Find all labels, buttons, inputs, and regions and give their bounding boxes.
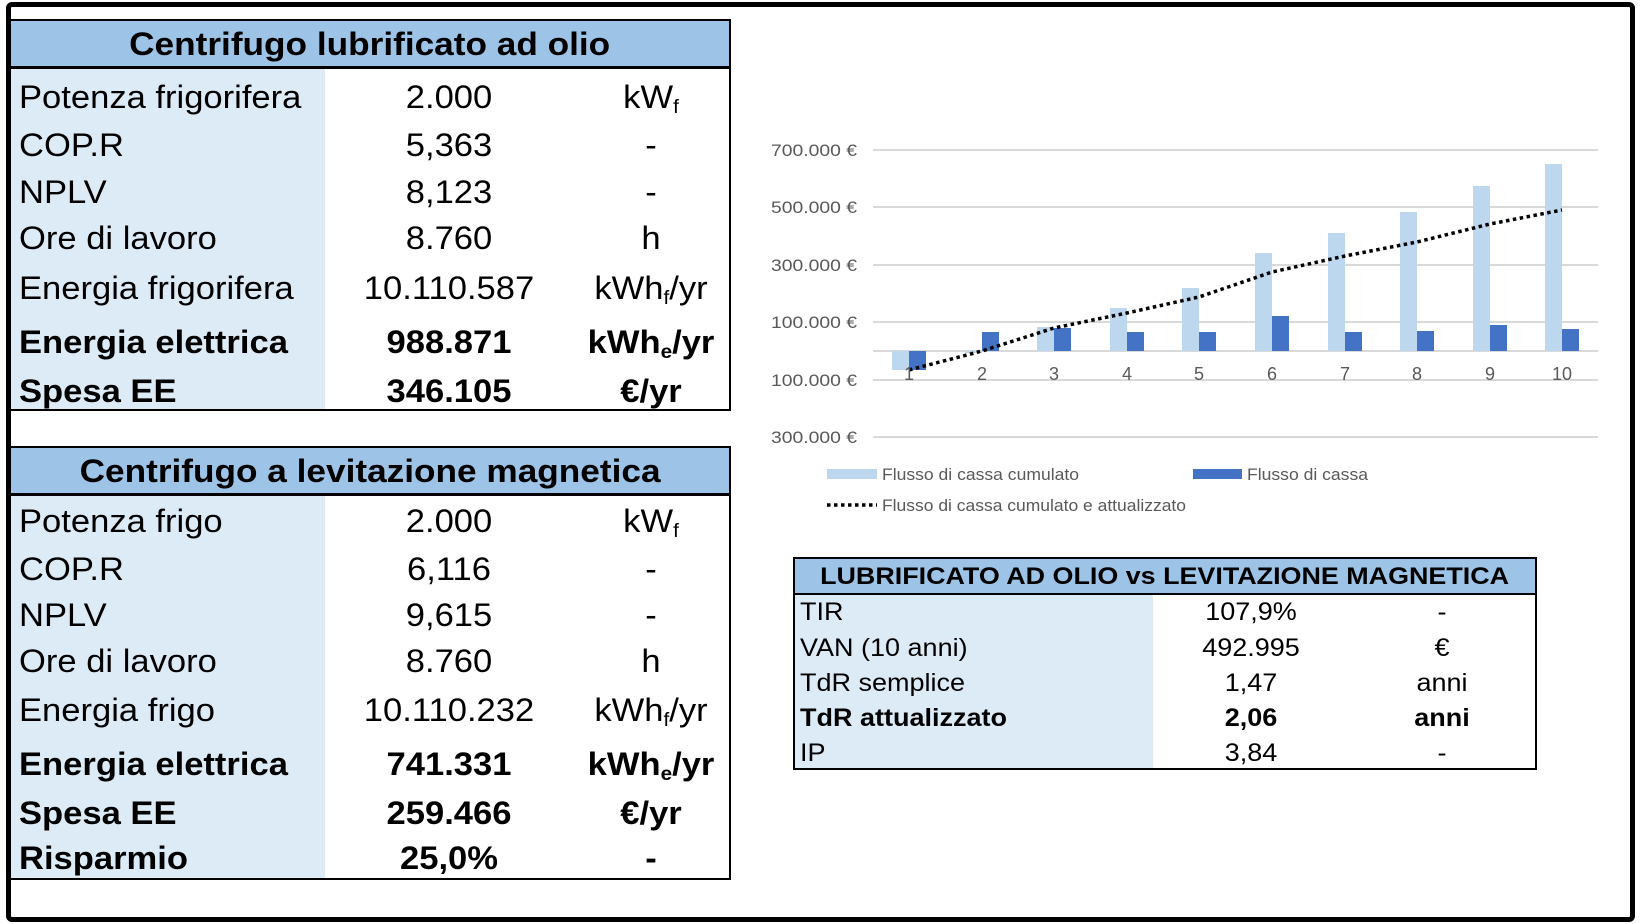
row: ore di lavoro: Ore di lavoro — [19, 220, 217, 256]
x axis labels: 2 — [977, 364, 987, 384]
row: VAN — [800, 634, 1450, 662]
row: VAN: € — [1434, 634, 1450, 662]
x axis labels: 1 — [904, 364, 914, 384]
row: potenza frigorifera — [19, 79, 679, 118]
panel: table centrifugo a levitazione magnetica — [9, 446, 731, 880]
row: potenza frigo: 2.000 — [406, 503, 492, 539]
row: energia elettrica: 741.331 — [387, 746, 511, 782]
row: TIR: TIR — [800, 598, 844, 626]
row: energia elettrica: kWhe/yr — [588, 746, 714, 785]
x axis labels: 6 — [1267, 364, 1277, 384]
row: energia frigorifera — [19, 270, 708, 309]
heading: comparison: LUBRIFICATO AD OLIO vs LEVITAZIONE MAGNETICA — [821, 563, 1509, 590]
row: energia elettrica — [19, 324, 714, 363]
row: energia frigo: Energia frigo — [19, 692, 215, 728]
row: spesa EE: Spesa EE — [19, 795, 177, 831]
heading: table 2 — [11, 448, 729, 496]
x axis labels: 3 — [1049, 364, 1059, 384]
row: energia elettrica: Energia elettrica — [19, 324, 288, 360]
bars: flusso di cassa — [909, 316, 1579, 370]
x axis labels: 7 — [1340, 364, 1350, 384]
row: potenza frigo: Potenza frigo — [19, 503, 223, 539]
row: energia frigo — [19, 692, 708, 731]
x axis labels: 5 — [1194, 364, 1204, 384]
row: NPLV: NPLV — [19, 174, 107, 210]
row: risparmio: 25,0% — [400, 840, 498, 876]
row: COP.R: - — [645, 551, 657, 587]
row: VAN: VAN (10 anni) — [800, 634, 968, 662]
x axis labels — [904, 364, 1572, 384]
row: energia frigorifera: Energia frigorifera — [19, 270, 294, 306]
row: energia elettrica — [19, 746, 714, 785]
row: energia elettrica: 988.871 — [387, 324, 511, 360]
heading: table 1 — [11, 21, 729, 69]
row: ore di lavoro — [19, 643, 661, 679]
row: energia frigorifera: 10.110.587 — [364, 270, 534, 306]
row: potenza frigorifera: Potenza frigorifera — [19, 79, 301, 115]
row: NPLV — [19, 174, 657, 210]
row: TIR — [800, 598, 1446, 626]
row: NPLV: 8,123 — [406, 174, 492, 210]
row: risparmio: - — [645, 840, 657, 876]
y axis labels: 100.000 € — [771, 313, 858, 332]
bars: flusso di cassa cumulato — [892, 164, 1562, 370]
row: energia elettrica: kWhe/yr — [588, 324, 714, 363]
row: IP: IP — [800, 739, 826, 767]
row: TdR semplice: anni — [1416, 669, 1468, 697]
row: TdR attualizzato: anni — [1414, 704, 1470, 732]
row: spesa EE — [19, 373, 682, 409]
legend: Flusso di cassa — [1247, 465, 1369, 484]
row: potenza frigorifera: 2.000 — [406, 79, 492, 115]
row: TdR attualizzato: 2,06 — [1225, 704, 1277, 732]
y axis labels: 500.000 € — [771, 198, 858, 217]
row: NPLV: 9,615 — [406, 597, 492, 633]
x axis labels: 9 — [1485, 364, 1495, 384]
row: TdR attualizzato: TdR attualizzato — [800, 704, 1007, 732]
heading: table 1: Centrifugo lubrificato ad olio — [129, 26, 611, 62]
row: ore di lavoro: 8.760 — [406, 643, 492, 679]
row: ore di lavoro: h — [641, 220, 661, 256]
row: TdR semplice — [800, 669, 1468, 697]
row: ore di lavoro: Ore di lavoro — [19, 643, 217, 679]
row: NPLV: NPLV — [19, 597, 107, 633]
line: flusso di cassa cumulato e attualizzato — [909, 210, 1562, 370]
row: spesa EE: Spesa EE — [19, 373, 177, 409]
row: TIR: - — [1438, 598, 1446, 626]
row: NPLV: - — [645, 597, 657, 633]
row: spesa EE: €/yr — [620, 795, 682, 831]
row: energia frigo: 10.110.232 — [364, 692, 534, 728]
row: COP.R: COP.R — [19, 127, 124, 163]
legend — [827, 465, 1369, 515]
row: spesa EE: 259.466 — [387, 795, 511, 831]
y axis labels: 700.000 € — [771, 141, 858, 160]
row: potenza frigorifera: kWf — [623, 79, 679, 118]
x axis labels: 10 — [1552, 364, 1572, 384]
row: IP: - — [1438, 739, 1446, 767]
row: TIR: 107,9% — [1205, 598, 1297, 626]
row: spesa EE: 346.105 — [387, 373, 511, 409]
row: COP.R: 6,116 — [407, 551, 491, 587]
row: energia frigo: kWhf/yr — [594, 692, 708, 731]
row: COP.R: COP.R — [19, 551, 124, 587]
panel: table centrifugo lubrificato ad olio — [9, 19, 731, 411]
row: COP.R: - — [645, 127, 657, 163]
row: COP.R — [19, 127, 657, 163]
x axis labels: 8 — [1412, 364, 1422, 384]
legend: Flusso di cassa cumulato e attualizzato — [882, 496, 1186, 515]
row: ore di lavoro: 8.760 — [406, 220, 492, 256]
row: energia elettrica: Energia elettrica — [19, 746, 288, 782]
row: VAN: 492.995 — [1202, 634, 1300, 662]
row: COP.R — [19, 551, 657, 587]
panel: comparison table — [793, 557, 1537, 770]
row: IP — [800, 739, 1446, 767]
row: risparmio: Risparmio — [19, 840, 188, 876]
row: spesa EE — [19, 795, 682, 831]
row: COP.R: 5,363 — [406, 127, 492, 163]
row: NPLV: - — [645, 174, 657, 210]
row: TdR semplice: 1,47 — [1225, 669, 1277, 697]
x axis labels: 4 — [1122, 364, 1132, 384]
y axis labels: 300.000 € — [771, 256, 858, 275]
legend: Flusso di cassa cumulato — [882, 465, 1079, 484]
y axis labels: 300.000 € — [771, 428, 858, 447]
row: potenza frigo — [19, 503, 679, 542]
row: spesa EE: €/yr — [620, 373, 682, 409]
heading: table 2: Centrifugo a levitazione magnetica — [80, 453, 660, 489]
row: IP: 3,84 — [1225, 739, 1277, 767]
row: risparmio — [19, 840, 657, 876]
row: ore di lavoro: h — [641, 643, 661, 679]
y axis labels — [771, 141, 858, 447]
heading: comparison — [795, 559, 1535, 595]
row: TdR semplice: TdR semplice — [800, 669, 965, 697]
row: TdR attualizzato — [800, 704, 1470, 732]
row: NPLV — [19, 597, 657, 633]
y axis labels: 100.000 € — [771, 371, 858, 390]
row: ore di lavoro — [19, 220, 661, 256]
row: energia frigorifera: kWhf/yr — [594, 270, 708, 309]
row: potenza frigo: kWf — [623, 503, 679, 542]
